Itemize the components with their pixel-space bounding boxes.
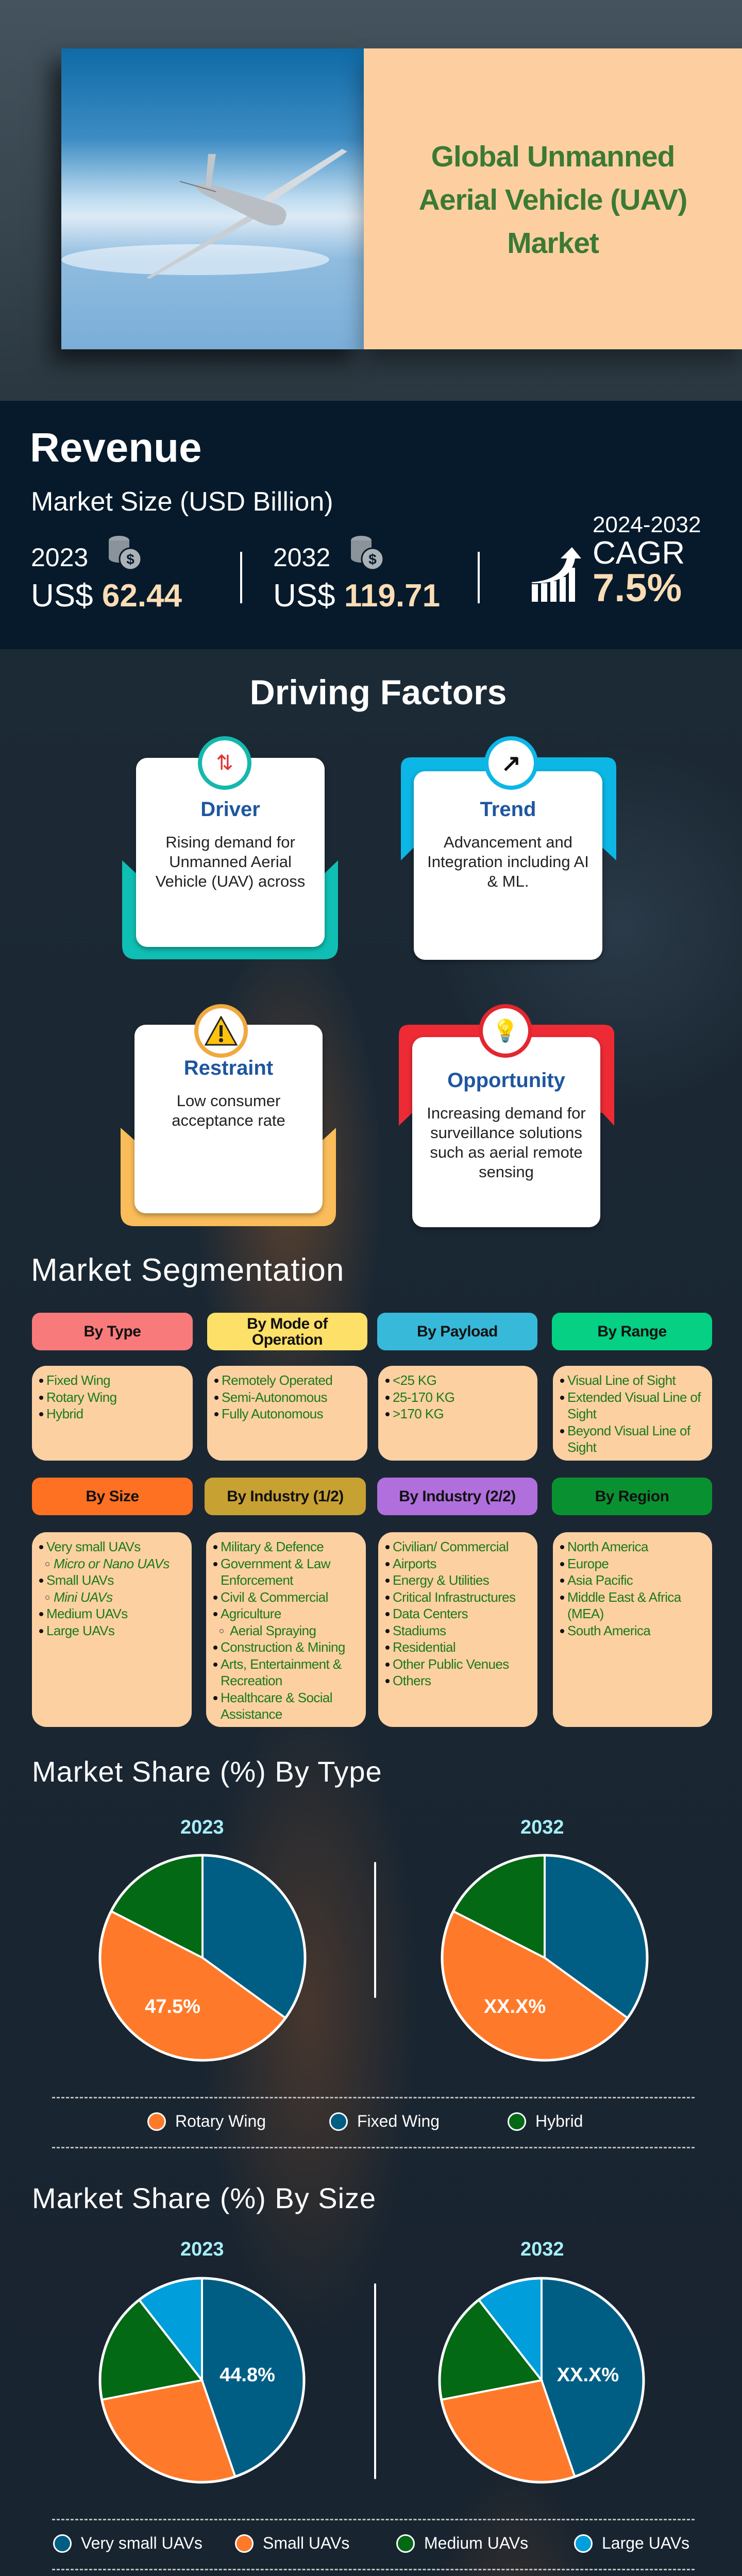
icon: coins: $ — [126, 551, 134, 567]
icon: coins — [351, 536, 382, 569]
header: by region: By Region — [595, 1488, 669, 1505]
2023 value: US$ 62.44 — [31, 578, 182, 614]
list: region: South America — [567, 1623, 650, 1638]
list: range: Beyond Visual Line of Sight — [567, 1423, 690, 1455]
list: size: Micro or Nano UAVs — [54, 1556, 170, 1571]
opportunity title: Opportunity — [447, 1069, 565, 1092]
pie chart: type 2023 — [99, 1854, 306, 2062]
CAGR text: CAGR — [593, 535, 685, 571]
panel: opportunity — [399, 1004, 614, 1229]
icon: growth chart — [532, 547, 581, 602]
header: by payload: By Payload — [417, 1323, 498, 1340]
icon: coins — [109, 536, 140, 569]
divider — [374, 2283, 376, 2479]
heading: market share by size: Market Share (%) By Size — [32, 2182, 376, 2214]
list: range — [553, 1366, 712, 1461]
icon: trend: ↗ — [501, 750, 521, 776]
list: region: Asia Pacific — [567, 1572, 633, 1588]
trend text: Advancement and Integration including AI & ML. — [427, 833, 589, 890]
header: by payload — [377, 1313, 537, 1350]
list: size: Medium UAVs — [46, 1606, 128, 1621]
header: by size — [32, 1478, 193, 1515]
banner: title panel — [364, 48, 742, 349]
pie chart: size 2023: 44.8% — [220, 2364, 275, 2386]
legend: type — [52, 2097, 695, 2148]
2032 value — [273, 536, 440, 614]
header: by industry 2: By Industry (2/2) — [399, 1488, 516, 1505]
legend: size — [52, 2519, 695, 2570]
list: size: Small UAVs — [46, 1572, 114, 1588]
market size label: Market Size (USD Billion) — [31, 487, 333, 517]
list: industry 2 — [378, 1532, 537, 1727]
icon: opportunity: 💡 — [492, 1018, 519, 1043]
revenue heading: Revenue — [30, 425, 201, 470]
divider — [374, 1862, 376, 1998]
list: payload: 25-170 KG — [393, 1389, 454, 1404]
list: size: Very small UAVs — [46, 1539, 141, 1554]
pie chart: type 2023: 47.5% — [145, 1996, 200, 2018]
legend: size: Large UAVs — [602, 2534, 689, 2552]
header: by region — [552, 1478, 712, 1515]
2023 value — [31, 536, 182, 614]
list: type: Hybrid — [46, 1406, 83, 1421]
list: range: Extended Visual Line of Sight — [567, 1389, 701, 1421]
label: 2023 size: 2023 — [180, 2239, 224, 2260]
legend: type: Fixed Wing — [357, 2112, 440, 2130]
2032 value: US$ 119.71 — [273, 578, 440, 614]
restraint title: Restraint — [184, 1057, 273, 1079]
2023 value: 2023 — [31, 543, 88, 572]
list: region: Europe — [567, 1556, 609, 1571]
driver text: Rising demand for Unmanned Aerial Vehicle (UAV) across — [156, 833, 305, 890]
banner: drone photo — [61, 48, 364, 349]
list: payload: >170 KG — [393, 1406, 444, 1421]
header: by type — [32, 1313, 193, 1350]
list: industry 1: Military & Defence — [221, 1539, 324, 1554]
heading: market segmentation: Market Segmentation — [31, 1252, 344, 1288]
legend: size: Small UAVs — [263, 2534, 349, 2552]
CAGR text: 7.5% — [593, 566, 682, 610]
list: industry 1: Construction & Mining — [221, 1639, 345, 1655]
list: type — [32, 1366, 193, 1461]
CAGR text — [593, 512, 701, 610]
list: size: Mini UAVs — [54, 1589, 113, 1604]
legend: type: Rotary Wing — [175, 2112, 266, 2130]
legend: size: Medium UAVs — [424, 2534, 528, 2552]
opportunity text: Increasing demand for surveillance solutions such as aerial remote sensing — [427, 1104, 586, 1181]
icon: driver: ⇅ — [216, 752, 233, 774]
label: 2023 type: 2023 — [180, 1817, 224, 1838]
list: industry 1: Civil & Commercial — [221, 1589, 328, 1604]
icon: driver — [198, 736, 251, 790]
header: by mode of operation — [207, 1313, 367, 1350]
title — [419, 140, 687, 260]
icon: opportunity — [479, 1004, 532, 1058]
header: by range — [552, 1313, 712, 1350]
list: industry 2: Others — [393, 1673, 431, 1688]
revenue band — [0, 401, 742, 649]
driver title: Driver — [200, 798, 260, 821]
header: by mode of operation: Operation — [252, 1331, 323, 1348]
header: by mode of operation: By Mode of — [247, 1315, 328, 1332]
title: Global Unmanned — [431, 140, 674, 173]
divider — [240, 552, 242, 603]
pie chart: size 2032 — [438, 2277, 645, 2483]
list: industry 1: Arts, Entertainment & Recreation — [221, 1656, 342, 1688]
list: mode: Fully Autonomous — [222, 1406, 323, 1421]
list: industry 2: Data Centers — [393, 1606, 468, 1621]
panel: trend — [401, 736, 616, 963]
heading: market share by type: Market Share (%) By Type — [32, 1755, 382, 1788]
list: range: Visual Line of Sight — [567, 1372, 676, 1388]
panel: driver — [122, 736, 338, 959]
list: size — [32, 1532, 192, 1727]
icon: warning — [194, 1004, 248, 1058]
title: Aerial Vehicle (UAV) — [419, 183, 687, 216]
pie chart: type 2032: XX.X% — [484, 1996, 546, 2018]
restraint text: Low consumer acceptance rate — [172, 1092, 285, 1129]
list: region: Middle East & Africa (MEA) — [567, 1589, 681, 1621]
list: industry 2: Critical Infrastructures — [393, 1589, 515, 1604]
heading: driving factors: Driving Factors — [250, 673, 507, 712]
segmentation grid — [32, 1313, 712, 1727]
header: by type: By Type — [83, 1323, 141, 1340]
list: mode — [207, 1366, 367, 1461]
2032 value: 2032 — [273, 543, 330, 572]
icon: coins: $ — [368, 551, 377, 567]
list: size: Large UAVs — [46, 1623, 114, 1638]
label: 2032 size: 2032 — [520, 2239, 564, 2260]
legend: size: Very small UAVs — [81, 2534, 203, 2552]
header: by industry 1: By Industry (1/2) — [227, 1488, 344, 1505]
list: industry 2: Civilian/ Commercial — [393, 1539, 509, 1554]
list: mode: Remotely Operated — [222, 1372, 332, 1388]
panel: restraint — [121, 1004, 336, 1226]
divider — [478, 552, 480, 603]
list: industry 2: Residential — [393, 1639, 456, 1655]
trend title: Trend — [480, 798, 536, 821]
header background — [0, 0, 742, 401]
pie chart: size 2023 — [99, 2277, 305, 2483]
list: industry 2: Airports — [393, 1556, 436, 1571]
legend: type: Hybrid — [535, 2112, 583, 2130]
label: 2032 type: 2032 — [520, 1817, 564, 1838]
list: industry 1: Agriculture — [221, 1606, 281, 1621]
pie chart: size 2032: XX.X% — [557, 2364, 619, 2386]
list: industry 2: Stadiums — [393, 1623, 446, 1638]
pie chart: type 2032 — [441, 1854, 648, 2062]
list: industry 1: Aerial Spraying — [230, 1623, 316, 1638]
list: type: Rotary Wing — [46, 1389, 116, 1404]
header: by range: By Range — [597, 1323, 667, 1340]
list: industry 2: Other Public Venues — [393, 1656, 509, 1671]
list: region: North America — [567, 1539, 648, 1554]
list: mode: Semi-Autonomous — [222, 1389, 327, 1404]
header: by industry 1 — [205, 1478, 366, 1515]
list: industry 1: Government & Law Enforcement — [221, 1556, 330, 1588]
list: industry 2: Energy & Utilities — [393, 1572, 489, 1588]
list: region — [553, 1532, 712, 1727]
list: payload: <25 KG — [393, 1372, 436, 1388]
list: type: Fixed Wing — [46, 1372, 110, 1388]
icon: trend — [484, 736, 538, 790]
list: payload — [378, 1366, 537, 1461]
title: Market — [507, 227, 599, 260]
list: industry 1: Healthcare & Social Assistance — [221, 1690, 332, 1722]
header: by industry 2 — [377, 1478, 537, 1515]
CAGR text: 2024-2032 — [593, 512, 701, 537]
list: industry 1 — [206, 1532, 366, 1727]
header: by size: By Size — [86, 1488, 139, 1505]
